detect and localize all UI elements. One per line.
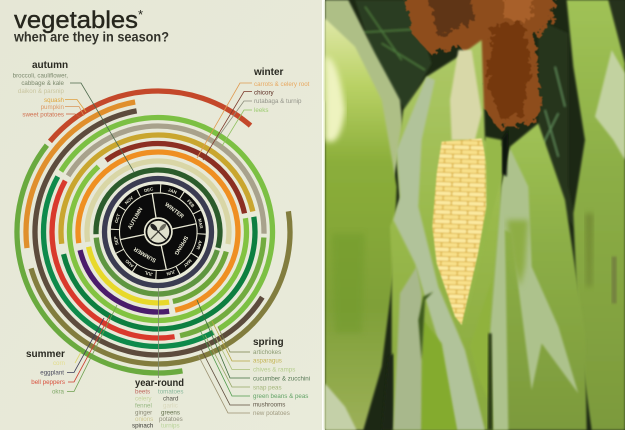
wedge dividers (120, 193, 196, 270)
labels: year-round: potatoes (159, 416, 183, 423)
month labels: MAY (182, 258, 193, 268)
month labels: NOV (124, 195, 134, 205)
labels: year-round (132, 378, 184, 430)
month labels: APR (195, 240, 203, 251)
labels: autumn: sweet potatoes (22, 112, 64, 118)
month labels: JUL (144, 270, 153, 277)
labels: winter: leeks (254, 107, 268, 114)
labels: year-round: greens (161, 410, 180, 416)
labels: spring (253, 337, 310, 417)
corn cob (432, 138, 488, 325)
far right husk (567, 0, 625, 430)
labels: autumn: squash (44, 97, 65, 104)
labels: summer: bell peppers (31, 379, 65, 386)
title: vegetables (14, 7, 138, 34)
title (13, 7, 169, 44)
shadow crack (418, 292, 433, 360)
dark grass background (345, 0, 625, 233)
season labels: SPRING (172, 234, 189, 256)
title: when are they in season? (13, 30, 169, 44)
center husk base (390, 40, 502, 430)
labels: year-round: beets (135, 388, 150, 396)
labels: summer: eggplant (40, 370, 64, 376)
chart: month and season dial (111, 184, 206, 279)
season labels (127, 202, 189, 263)
labels: autumn: broccoli, cauliflower, (13, 72, 68, 80)
season labels: AUTUMN (127, 207, 144, 231)
labels: summer (26, 349, 66, 396)
chart: seasonal rings (0, 33, 357, 430)
labels: year-round: chard (163, 396, 179, 402)
labels: spring: chives & ramps (253, 366, 295, 374)
labels: winter: rutabaga & turnip (254, 98, 302, 105)
month labels: DEC (144, 186, 155, 193)
labels: winter: carrots & celery root (254, 81, 310, 88)
labels: year-round: year-round (135, 378, 184, 389)
far left leaf (325, 0, 403, 187)
labels: spring: artichokes (253, 349, 281, 356)
month labels: FEB (186, 199, 196, 208)
gray lower left husk (393, 267, 422, 430)
month labels: JUN (166, 269, 176, 276)
husk right of cob (470, 280, 492, 403)
labels: autumn: pumpkin (41, 104, 65, 111)
labels: spring: cucumber & zucchini (253, 376, 310, 382)
labels: summer: corn (53, 360, 66, 367)
labels: year-round: garlic (163, 402, 178, 410)
labels: spring: asparagus (253, 358, 282, 364)
labels: summer: okra (52, 388, 65, 396)
husk sliver beside cob (462, 137, 502, 333)
white top of cob (450, 50, 482, 140)
labels: year-round: celery (135, 396, 152, 402)
icon: fork and spoon (144, 217, 173, 246)
labels: year-round: turnips (161, 422, 180, 430)
labels: spring: spring (253, 337, 284, 348)
labels: summer: summer (26, 349, 65, 360)
panel: vegetable season infographic (0, 0, 357, 430)
dark crack between husks (502, 130, 508, 177)
month labels: AUG (124, 258, 135, 269)
dark shadow sliver bottom left (382, 353, 393, 430)
labels: year-round: onions (135, 416, 153, 423)
month labels: SEP (113, 236, 120, 245)
labels: autumn: autumn (32, 60, 68, 71)
labels: year-round: fennel (135, 402, 152, 410)
labels: winter: chicory (254, 90, 275, 96)
right center husk (490, 123, 587, 430)
month labels (113, 186, 204, 277)
month labels: MAR (197, 218, 204, 230)
photo: corn in the husk (325, 0, 625, 430)
labels: year-round: spinach (132, 422, 154, 430)
brown corn silk (402, 0, 558, 128)
season labels: SUMMER (133, 245, 158, 263)
large left husk (325, 18, 397, 430)
labels: spring: green beans & peas (253, 393, 308, 400)
pale husk strip (393, 77, 485, 430)
labels: spring: mushrooms (253, 402, 285, 408)
title: * (138, 7, 143, 22)
labels: winter: winter (253, 67, 284, 78)
labels: year-round: tomatoes (158, 388, 183, 396)
labels: winter (253, 67, 310, 114)
bright green lower center (422, 320, 457, 430)
labels: autumn: cabbage & kale (21, 80, 65, 87)
labels: spring: snap peas (253, 384, 282, 392)
leader lines (65, 83, 252, 413)
labels: autumn: daikon & parsnip (18, 88, 65, 95)
labels: spring: new potatoes (253, 410, 290, 417)
month labels: OCT (114, 213, 121, 224)
labels: year-round: ginger (135, 410, 152, 416)
month labels: JAN (167, 187, 177, 195)
labels: autumn (13, 60, 68, 118)
season labels: WINTER (163, 202, 185, 220)
